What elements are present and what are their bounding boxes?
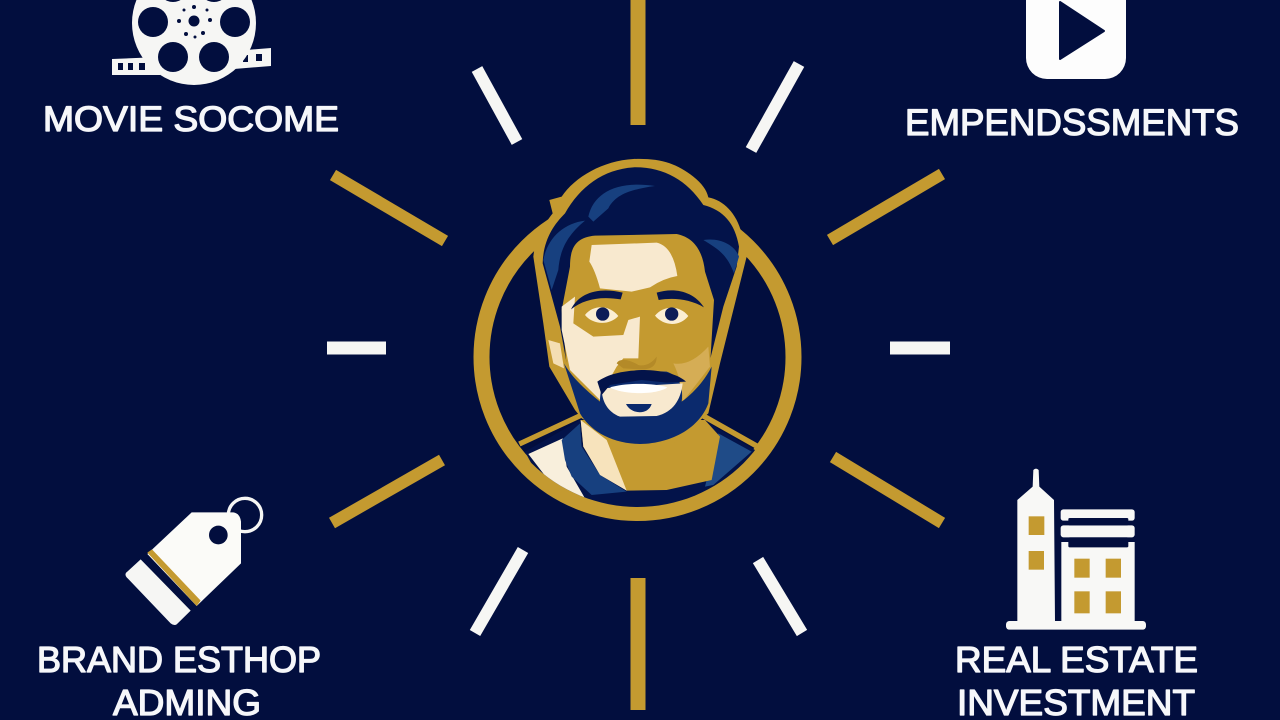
icon: price tag (125, 498, 262, 625)
icon: film reel (112, 0, 271, 85)
right cheek sliver (673, 347, 710, 402)
label: real estate: REAL ESTATE (955, 639, 1198, 680)
moustache (597, 370, 686, 395)
ear (548, 340, 564, 368)
nose shadow (617, 357, 657, 369)
shirt and shoulders (525, 420, 755, 517)
icon: play button (1026, 0, 1126, 79)
beard (564, 363, 712, 444)
shoulder lines (519, 415, 757, 446)
panel: real estate investment (955, 469, 1198, 720)
label: empendssments: EMPENDSSMENTS (905, 102, 1239, 143)
icon: buildings (1006, 469, 1146, 630)
label: movie socome: MOVIE SOCOME (43, 100, 339, 139)
panel: brand endorsement (37, 498, 321, 720)
left cheek light (562, 297, 640, 402)
radiating rays (327, 0, 950, 710)
forehead light (589, 243, 677, 292)
hair highlights (543, 185, 739, 290)
central portrait medallion (482, 159, 794, 517)
portrait head (519, 159, 757, 447)
hair (543, 167, 739, 367)
panel: endorsements (905, 0, 1239, 143)
label: brand esthop: BRAND ESTHOP (37, 639, 321, 680)
eyes (585, 307, 688, 324)
head gold outline (533, 159, 747, 447)
gold ring (482, 201, 794, 513)
eyebrows (571, 290, 704, 309)
chin and mouth (602, 383, 683, 417)
face gold (562, 234, 714, 403)
panel: movie income (43, 0, 339, 139)
